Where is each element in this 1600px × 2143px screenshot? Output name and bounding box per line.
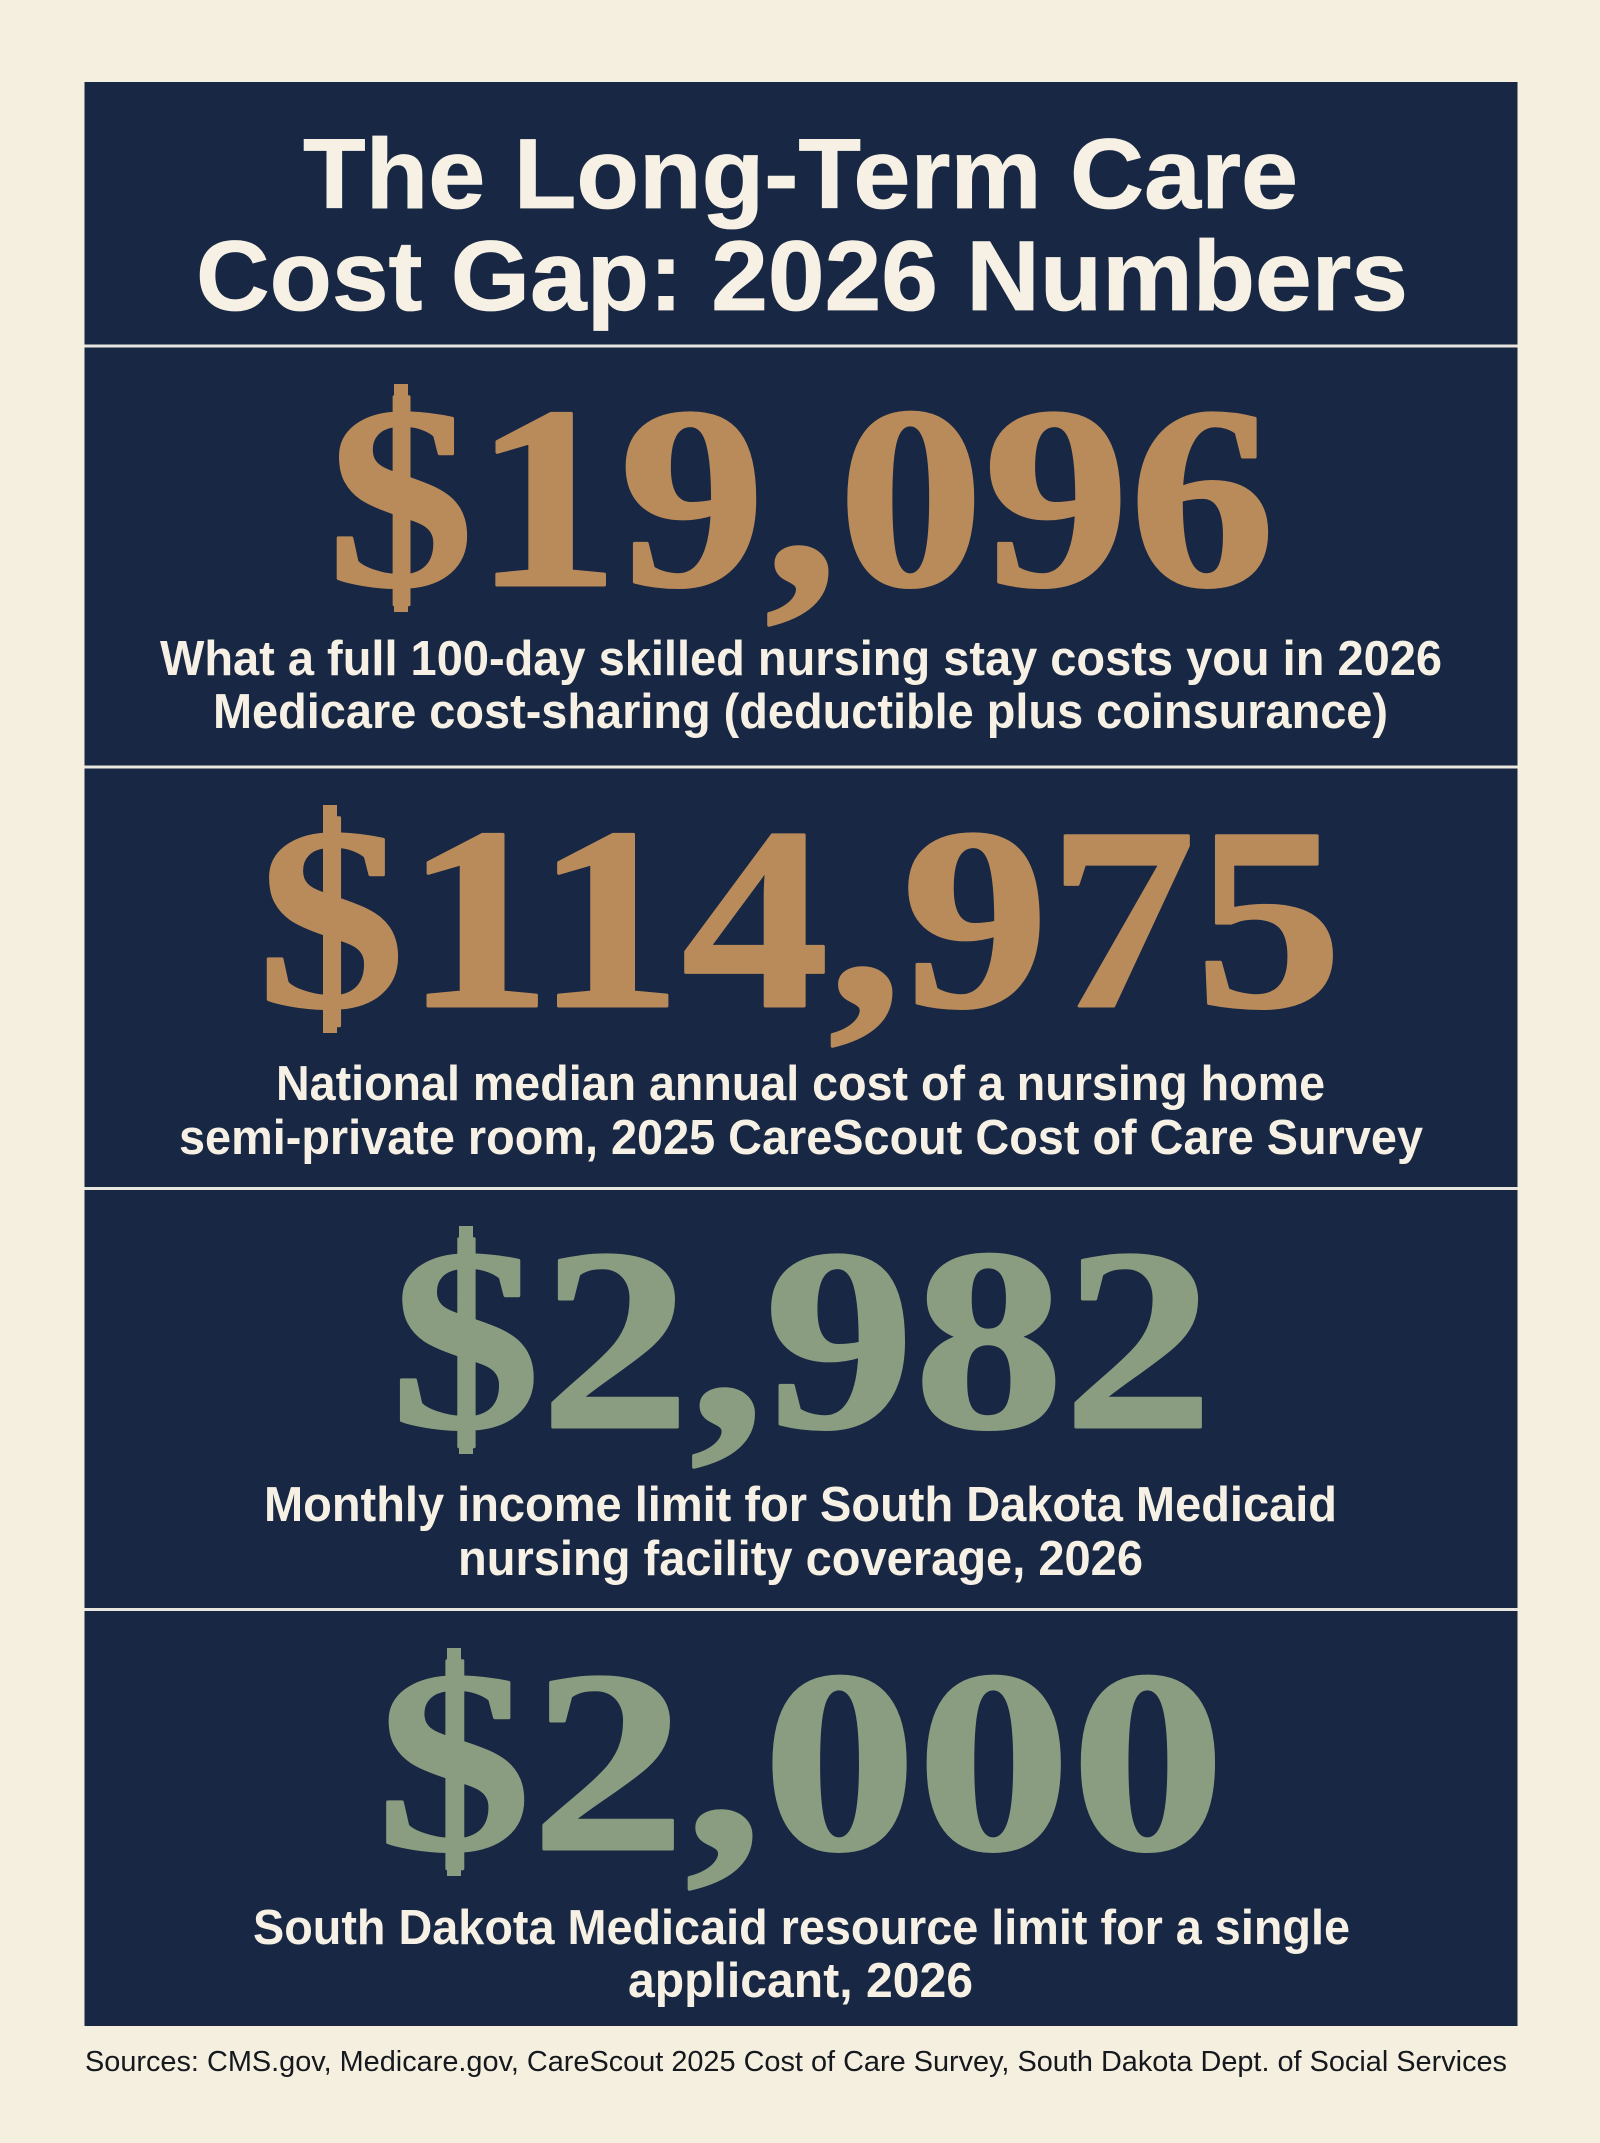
caption: What a full 100-day skilled nursing stay costs you in 2026 xyxy=(160,632,1442,686)
number: $114,975 xyxy=(258,775,1342,1063)
caption: National median annual cost of a nursing home xyxy=(276,1057,1325,1111)
number: $2,982 xyxy=(391,1196,1213,1484)
caption: Monthly income limit for South Dakota Medicaid xyxy=(264,1478,1337,1532)
caption xyxy=(179,1057,1423,1165)
stat: $2,000 xyxy=(253,1618,1350,2008)
caption: Medicare cost-sharing (deductible plus coinsurance) xyxy=(213,685,1388,739)
sources footnote: Sources: CMS.gov, Medicare.gov, CareScout 2025 Cost of Care Survey, South Dakota Dept. of Social Services xyxy=(85,2046,1507,2078)
number: $19,096 xyxy=(328,354,1275,642)
number: $2,000 xyxy=(377,1618,1225,1906)
caption xyxy=(160,632,1442,739)
title xyxy=(196,118,1408,331)
stat: $114,975 xyxy=(179,775,1423,1165)
stat: $2,982 xyxy=(264,1196,1337,1586)
caption: nursing facility coverage, 2026 xyxy=(458,1532,1143,1586)
stat: $19,096 xyxy=(160,354,1442,739)
caption: semi-private room, 2025 CareScout Cost of Care Survey xyxy=(179,1111,1423,1165)
title: Cost Gap: 2026 Numbers xyxy=(196,220,1408,331)
caption: applicant, 2026 xyxy=(628,1954,973,2008)
title: The Long-Term Care xyxy=(303,118,1298,229)
caption: South Dakota Medicaid resource limit for a single xyxy=(253,1901,1350,1955)
caption xyxy=(264,1478,1337,1586)
caption xyxy=(253,1901,1350,2008)
